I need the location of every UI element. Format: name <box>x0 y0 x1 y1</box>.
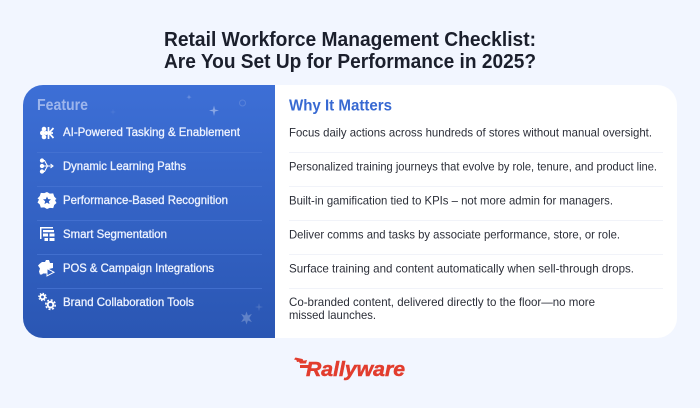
title <box>164 29 536 73</box>
icon: learning paths <box>40 159 53 173</box>
feature labels: Performance-Based Recognition <box>63 193 228 207</box>
title: Are You Set Up for Performance in 2025? <box>164 51 536 73</box>
heading: why it matters: Why It Matters <box>289 98 392 114</box>
decorative sparkles <box>110 94 263 324</box>
icon: collaboration gears <box>39 293 55 309</box>
panel: feature <box>23 85 275 338</box>
feature labels: Dynamic Learning Paths <box>63 159 186 173</box>
text: descriptions: Focus daily actions across hundreds of stores without manual oversight. <box>289 126 652 140</box>
text: descriptions <box>289 126 657 322</box>
text: descriptions: Surface training and content automatically when sell-through drops. <box>289 262 634 276</box>
icon: recognition badge <box>38 192 56 209</box>
feature labels <box>63 125 241 309</box>
icon: AI tasking <box>40 127 54 139</box>
text: descriptions: Co-branded content, delivered directly to the floor—no more <box>289 295 595 309</box>
icon: integrations <box>38 260 54 276</box>
feature labels: POS & Campaign Integrations <box>63 261 214 275</box>
icon: segmentation <box>40 227 54 241</box>
panel: why it matters <box>260 85 677 338</box>
text: descriptions: Built-in gamification tied to KPIs – not more admin for managers. <box>289 194 613 208</box>
heading: feature: Feature <box>37 97 88 114</box>
text: descriptions: missed launches. <box>289 308 376 322</box>
feature labels: AI-Powered Tasking & Enablement <box>63 125 241 139</box>
feature labels: Brand Collaboration Tools <box>63 295 194 309</box>
text: descriptions: Personalized training journeys that evolve by role, tenure, and product line. <box>289 160 657 174</box>
logo: Rallyware: Rallyware <box>306 359 405 381</box>
text: descriptions: Deliver comms and tasks by associate performance, store, or role. <box>289 228 620 242</box>
title: Retail Workforce Management Checklist: <box>164 29 536 51</box>
feature labels: Smart Segmentation <box>63 227 167 241</box>
